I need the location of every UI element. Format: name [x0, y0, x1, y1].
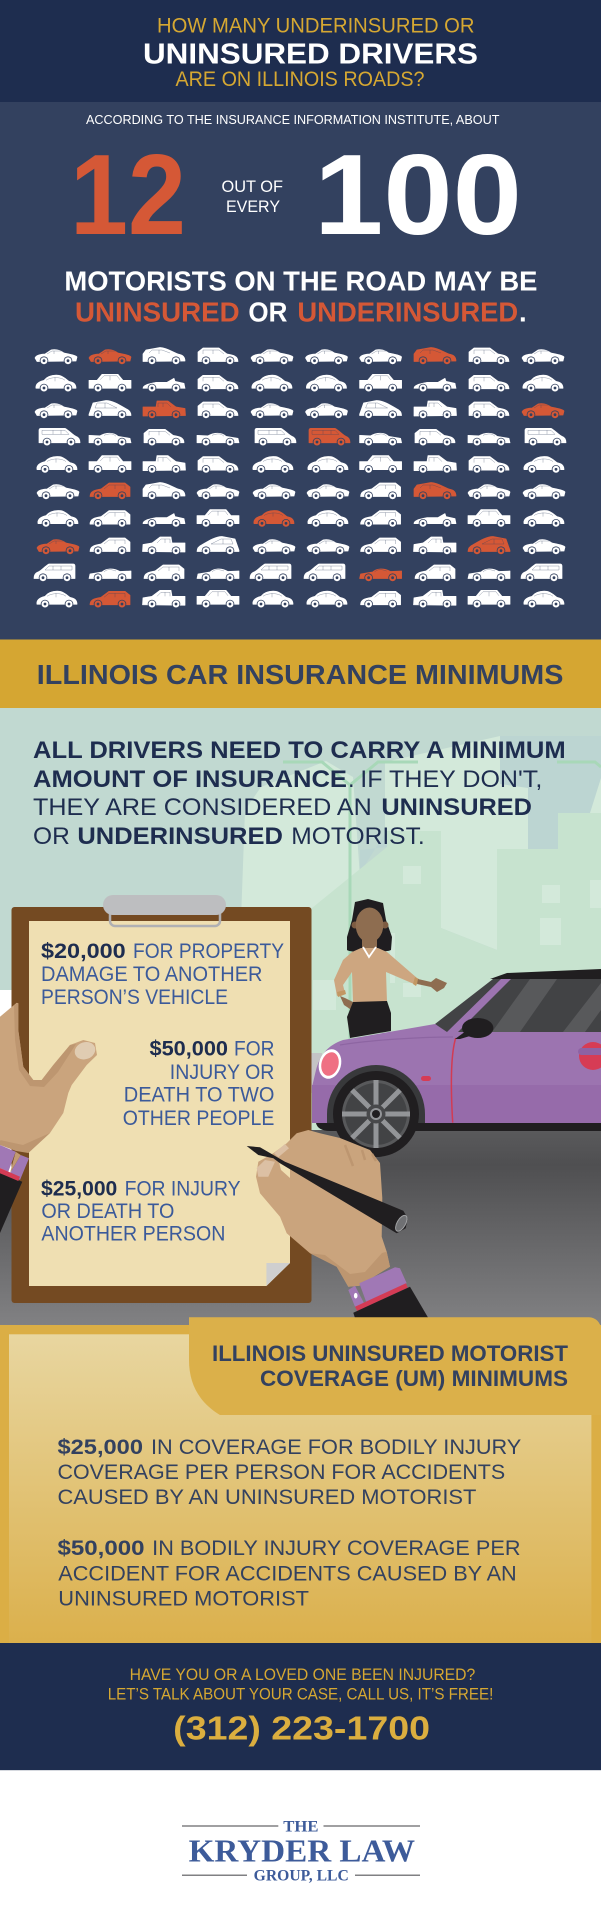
minimum: injury to one person: ANOTHER PERSON [41, 1223, 225, 1246]
paper sheet [29, 921, 290, 1286]
big number 12: 12 [70, 132, 186, 259]
tab heading: COVERAGE (UM) MINIMUMS [260, 1366, 568, 1391]
minimum: injury to one person: OR DEATH TO [41, 1200, 174, 1223]
coverage per accident: $50,000 [58, 1537, 144, 1560]
clipboard [12, 895, 312, 1303]
big number 100: 100 [314, 132, 522, 259]
out of every: OUT OF [222, 177, 283, 196]
clip [103, 895, 226, 926]
intro text [33, 738, 566, 850]
logo: The Kryder Law Group: GROUP, LLC [254, 1868, 349, 1885]
logo: The Kryder Law Group: KRYDER LAW [189, 1832, 415, 1868]
heading: uninsured drivers: UNINSURED DRIVERS [143, 38, 478, 70]
minimum: property damage [41, 940, 284, 1009]
minimum: injury to two people [123, 1038, 274, 1130]
out of every: EVERY [226, 197, 280, 216]
coverage per person [58, 1436, 521, 1509]
coverage per person: IN COVERAGE FOR BODILY INJURY [151, 1436, 521, 1459]
intro text: ALL DRIVERS NEED TO CARRY A MINIMUM [33, 738, 566, 764]
minimum: property damage: $20,000 [41, 940, 126, 963]
side mirror [455, 1018, 493, 1039]
road [0, 1130, 601, 1325]
statement line 2: . [519, 297, 527, 328]
minimum: injury to one person: $25,000 [41, 1178, 117, 1201]
logo: The Kryder Law Group [0, 1770, 601, 1931]
statement line 2: UNDERINSURED [297, 297, 518, 328]
minimum: injury to one person: FOR INJURY [125, 1178, 241, 1201]
coverage per person: $25,000 [58, 1436, 143, 1459]
panel: uninsured motorist minimums [0, 1317, 601, 1643]
coverage per accident [58, 1537, 520, 1611]
header banner [0, 0, 601, 102]
minimum: injury to two people: $50,000 [150, 1038, 228, 1061]
coverage per accident: UNINSURED MOTORIST [58, 1588, 309, 1611]
woman figure [334, 899, 447, 1038]
coverage per person: COVERAGE PER PERSON FOR ACCIDENTS [58, 1461, 505, 1484]
minimum: injury to two people: INJURY OR [170, 1061, 274, 1084]
heading: how many underinsured: HOW MANY UNDERINSURED OR [157, 13, 474, 37]
heading band: Illinois car insurance minimums [0, 640, 601, 708]
panel: city street scene [0, 708, 601, 1325]
call to action text [108, 1665, 493, 1703]
statement line 1: MOTORISTS ON THE ROAD MAY BE [64, 266, 537, 297]
pen [247, 1146, 408, 1233]
intro text: UNDERINSURED [77, 824, 283, 850]
intro text: IF THEY DON'T, [360, 767, 542, 793]
statement line 2: UNINSURED [75, 297, 240, 328]
statement line 2 [75, 297, 527, 328]
underbody [316, 1123, 601, 1131]
shirt cuff and sleeve [348, 1267, 407, 1307]
street lamps [283, 762, 601, 1045]
logo: The Kryder Law Group: THE [283, 1818, 318, 1835]
minimum: injury to one person [41, 1178, 241, 1246]
door handle [579, 1042, 601, 1070]
left hand holding clipboard [0, 1003, 98, 1233]
out of every [222, 177, 283, 216]
purple car [312, 969, 601, 1157]
minimum: property damage: DAMAGE TO ANOTHER [41, 963, 262, 986]
car row 3 [35, 400, 564, 419]
wheel [327, 1065, 425, 1157]
car row 5 [37, 456, 564, 474]
intro text: MOTORIST. [291, 824, 425, 850]
coverage per person: CAUSED BY AN UNINSURED MOTORIST [58, 1486, 477, 1509]
statement line 2: OR [248, 297, 288, 328]
call to action text: HAVE YOU OR A LOVED ONE BEEN INJURED? [130, 1665, 475, 1684]
sidewalk strips [0, 990, 14, 1200]
tab heading [189, 1317, 601, 1415]
phone number: (312) 223-1700 [173, 1710, 430, 1747]
intro text: AMOUNT OF INSURANCE [33, 767, 347, 793]
intro text: UNINSURED [381, 795, 532, 821]
right hand with pen [247, 1130, 428, 1318]
coverage per accident: IN BODILY INJURY COVERAGE PER [152, 1537, 520, 1560]
car grid: 100 cars with 12 highlighted [34, 348, 566, 608]
panel: statistic [0, 102, 601, 640]
heading band: Illinois car insurance minimums: ILLINOIS CAR INSURANCE MINIMUMS [37, 659, 563, 690]
intro text: . [348, 767, 355, 793]
building windows [313, 770, 601, 1010]
minimum: property damage: FOR PROPERTY [133, 940, 284, 963]
door line [451, 1038, 456, 1123]
minimum: injury to two people: DEATH TO TWO [124, 1084, 274, 1107]
car row 4 [39, 428, 566, 446]
intro text: OR [33, 824, 70, 850]
car row 6 [37, 482, 565, 500]
coverage per accident: ACCIDENT FOR ACCIDENTS CAUSED BY AN [58, 1563, 517, 1586]
car row 1 [35, 348, 564, 365]
footer call to action [0, 1643, 601, 1770]
call to action text: LET’S TALK ABOUT YOUR CASE, CALL US, IT’S FREE! [108, 1684, 493, 1703]
car row 2 [36, 374, 563, 392]
intro text: THEY ARE CONSIDERED AN [33, 795, 372, 821]
headlight [315, 1047, 345, 1081]
tab heading: ILLINOIS UNINSURED MOTORIST [212, 1341, 569, 1366]
heading: on Illinois roads: ARE ON ILLINOIS ROADS? [176, 67, 425, 91]
car row 7 [38, 510, 564, 528]
source line: ACCORDING TO THE INSURANCE INFORMATION INSTITUTE, ABOUT [86, 112, 499, 127]
car row 10 [37, 590, 564, 608]
car row 8 [37, 536, 565, 555]
minimum: property damage: PERSON’S VEHICLE [41, 986, 228, 1009]
minimum: injury to two people: OTHER PEOPLE [123, 1107, 274, 1130]
minimum: injury to two people: FOR [234, 1038, 274, 1061]
car row 9 [34, 564, 562, 582]
